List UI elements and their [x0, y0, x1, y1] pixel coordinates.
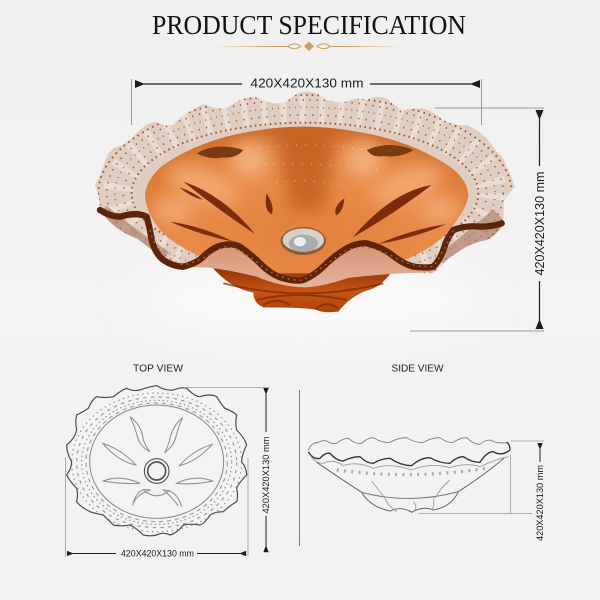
side view dimensions: 420X420X130 mm — [535, 465, 545, 541]
top view drain — [144, 459, 169, 483]
top view dimensions: 420X420X130 mm — [261, 437, 271, 513]
side view line drawing — [308, 438, 510, 512]
top view rim texture — [72, 393, 242, 532]
sparkles — [237, 145, 383, 187]
divider between views — [298, 390, 300, 546]
dimension: main height: 420X420X130 mm — [533, 172, 547, 276]
top view line drawing — [67, 386, 247, 536]
dark patches at top of bowl — [197, 147, 243, 158]
front wavy rim — [100, 210, 502, 281]
side view body — [317, 458, 504, 512]
top view petals — [103, 417, 213, 507]
dark petals — [170, 182, 447, 244]
rim speckle texture — [98, 95, 512, 292]
main product photo: glass basin — [95, 92, 515, 335]
side view front rim — [308, 442, 510, 466]
top view dimensions — [66, 388, 271, 558]
heading: side view: SIDE VIEW — [392, 362, 444, 374]
title: PRODUCT SPECIFICATION — [152, 10, 466, 40]
drain ring — [281, 227, 326, 255]
title ornament — [213, 42, 403, 51]
front lip glass — [147, 217, 443, 287]
bowl soft shading — [153, 123, 460, 223]
floor glow — [140, 265, 480, 335]
basin pedestal — [212, 267, 395, 312]
heading: top view: TOP VIEW — [133, 362, 183, 374]
clear ruffled rim — [95, 92, 515, 273]
side view back rim — [308, 438, 508, 450]
dimension: main width: 420X420X130 mm — [250, 76, 364, 90]
side view dimensions — [418, 441, 545, 541]
top view dimensions: 420X420X130 mm — [121, 548, 194, 558]
inner bowl — [145, 127, 468, 273]
